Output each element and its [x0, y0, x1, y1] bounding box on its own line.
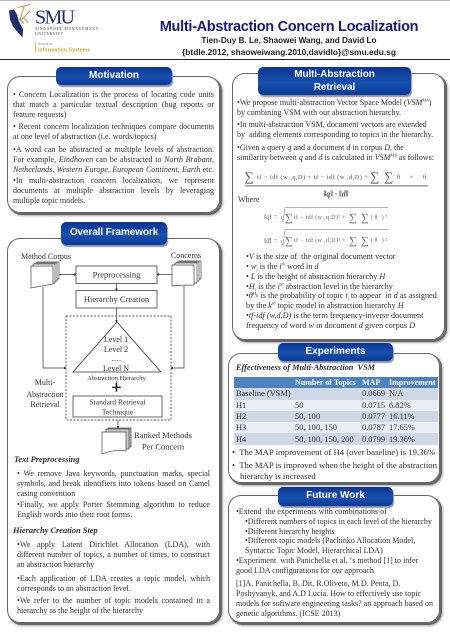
- heading: multi-abstraction retrieval: Retrieval: [314, 82, 355, 93]
- heading: future work: Future Work: [306, 490, 365, 501]
- text: motivation bullets: multiple topic models.: [13, 196, 85, 205]
- heading: experiments: Experiments: [305, 346, 366, 357]
- formula: similarity: ‖q‖ · ‖d‖: [323, 190, 349, 198]
- formula: norm q: ‖d‖ =: [264, 237, 278, 245]
- header band: [0, 0, 450, 60]
- text: experiment findings: [232, 447, 437, 481]
- box: standard retrieval technique: [73, 396, 162, 417]
- text: VSM description: by combining VSM with our abstraction hierarchy.: [237, 108, 401, 117]
- text: motivation bullets: •A word can be abstracted at multiple levels of abstraction.: [13, 145, 214, 154]
- panel: overall framework: [7, 238, 220, 623]
- text: VSM description: by adding elements corresponding to topics in the hierarchy.: [237, 130, 433, 139]
- label: multi-abstraction retrieval: Multi-: [35, 378, 56, 387]
- text: experiment findings: • The MAP improvement of H4 (over baseline) is 19.36%: [232, 447, 435, 457]
- text: motivation bullets: [12, 90, 214, 205]
- logo: SMU: School of: [38, 42, 52, 46]
- formula: norm q: ∑: [349, 235, 357, 247]
- text: notation list: •θHk is the probability of topic ti to appear in d as assigned: [246, 291, 437, 302]
- panel: motivation: [7, 76, 220, 213]
- text: VSM description: similarity between q and d is calculated in VSMMA as follows:: [237, 153, 434, 162]
- text: future work bullets: [236, 507, 432, 575]
- formula: norm q: +: [342, 238, 346, 244]
- text: hierarchy creation bullets: an abstraction hierarchy: [17, 560, 94, 569]
- formula: similarity: θ × θ: [397, 174, 426, 181]
- text: future work bullets: •Different topic models (Pachinko Allocation Model,: [245, 536, 415, 545]
- text: hierarchy creation bullets: •We apply Latent Dirichlet Allocation (LDA), with: [17, 540, 210, 549]
- box: standard retrieval technique: Standard Retrieval: [89, 398, 146, 406]
- text: future work bullets: •Extend the experiments with combinations of: [236, 507, 387, 516]
- text: future work bullets: good LDA configurations for our approach: [236, 566, 374, 575]
- box: preprocessing: Preprocessing: [93, 270, 141, 280]
- logo: SMU: UNIVERSITY: [35, 32, 63, 36]
- text: notation list: by the kth topic model in abstraction hierarchy H: [246, 301, 404, 310]
- heading: overall framework: Overall Framework: [70, 227, 158, 238]
- table: results: 0.0777: [362, 412, 385, 421]
- label: ranked methods: Ranked Methods: [134, 430, 192, 440]
- text: preprocessing bullets: [17, 469, 210, 519]
- text: hierarchy creation bullets: [17, 540, 210, 615]
- text: preprocessing bullets: casing convention: [17, 489, 75, 498]
- formula: similarity: tf − idf (w ,q,D) × tf − idf (w ,d,D) +: [257, 174, 368, 181]
- panel: multi-abstraction retrieval: [232, 73, 445, 340]
- formula: similarity: ∑: [370, 169, 379, 184]
- text: notation list: • L is the height of abstraction hierarchy H: [246, 272, 385, 281]
- label: concerns: Concerns: [171, 251, 201, 260]
- table: results: 0.0787: [362, 423, 385, 432]
- triangle: abstraction hierarchy: ….: [111, 354, 121, 363]
- text: preprocessing bullets: •Finally, we apply Porter Stemming algorithm to reduce: [17, 500, 210, 509]
- text: motivation bullets: that match a particular textual description (bug reports or: [13, 100, 214, 109]
- text: preprocessing bullets: • We remove Java keywords, punctuation marks, special: [17, 469, 210, 478]
- label: ranked methods: Per Concern: [142, 442, 185, 452]
- text: VSM description: •Given a query q and a document d in corpus D, the: [237, 143, 404, 152]
- table: results: 0.0669: [362, 389, 385, 398]
- formula: norm q: tf − idf (w ,q,D)²: [294, 214, 340, 221]
- logo: SMU: SMU: [35, 6, 76, 28]
- label: ranked methods: [134, 430, 192, 452]
- label: method corpus: Method Corpus: [21, 252, 71, 261]
- panel: experiments: [228, 353, 440, 483]
- text: hierarchy creation bullets: different number of topics, a number of times, to construct: [17, 550, 210, 559]
- table: results: H4: [236, 435, 246, 444]
- emails: {btdle.2012, shaoweiwang.2010,davidlo}@smu.edu.sg: [182, 46, 396, 56]
- formula: norm q: tf − idf (w ,d,D)²: [294, 237, 340, 244]
- title: Multi-Abstraction Concern Localization: [160, 18, 418, 34]
- formula: norm q: ∑: [285, 235, 293, 247]
- table: results: Improvement: [389, 378, 436, 387]
- table: results: [234, 377, 438, 445]
- text: VSM description: •We propose multi-abstraction Vector Space Model (VSMMA): [237, 98, 431, 107]
- text: notation list: • wi is the ith word in d: [246, 261, 318, 273]
- triangle: abstraction hierarchy: [73, 322, 161, 373]
- text: motivation bullets: • Concern Localization is the process of locating code units: [13, 90, 214, 99]
- text: hierarchy creation bullets: •Each application of LDA creates a topic model, which: [17, 574, 210, 583]
- table: results: 6.82%: [389, 401, 411, 410]
- text: preprocessing bullets: English words into their root forms.: [17, 510, 132, 519]
- formula: norm q: ∑: [285, 212, 293, 224]
- table: results: 19.36%: [389, 435, 415, 444]
- text: reference: models for software engineering tasks? an approach based on: [236, 599, 433, 608]
- triangle: abstraction hierarchy: Level 1: [104, 335, 128, 344]
- box: hierarchy creation: Hierarchy Creation: [84, 294, 150, 304]
- dashed box: multi-abstraction retrieval: [66, 316, 171, 420]
- diagram: framework flow: [21, 251, 202, 454]
- text: reference: [1]A. Panichella, B. Dit, R.Oliveto, M.D. Penta, D.: [236, 579, 400, 588]
- text: hierarchy creation bullets: hierarchy as the height of the hierarchy: [17, 606, 143, 615]
- table: results: 0.0799: [362, 435, 385, 444]
- icon: concerns documents: [172, 261, 201, 286]
- heading: multi-abstraction retrieval: [258, 67, 411, 95]
- text: motivation bullets: •In multi-abstraction concern localization, we represent: [13, 176, 214, 185]
- panel: future work: [228, 495, 440, 623]
- formula: similarity: [244, 169, 428, 198]
- text: motivation bullets: documents at multiple abstraction levels by leveraging: [13, 186, 214, 195]
- table: results: 17.65%: [389, 423, 415, 432]
- triangle: abstraction hierarchy: Level 2: [104, 345, 128, 354]
- label: multi-abstraction retrieval: Abstraction: [26, 390, 64, 399]
- text: VSM description: [237, 98, 434, 162]
- text: reference: genetic algorithms. (ICSE 2013): [236, 609, 340, 618]
- text: motivation bullets: • Recent concern localization techniques compare documents: [13, 122, 214, 131]
- formula: norm q: ∑: [349, 212, 357, 224]
- text: reference: Poshyvanyk, and A.D Lucia. How to effectively use topic: [236, 589, 421, 598]
- text: experiment findings: • The MAP is improved when the height of the abstraction: [232, 460, 437, 470]
- formula: norm q: ∑: [361, 235, 369, 247]
- heading: overall framework: [61, 222, 167, 245]
- arrows: flow connectors: [43, 274, 184, 428]
- text: reference: [236, 579, 433, 618]
- heading: multi-abstraction retrieval: Multi-Abstraction: [294, 69, 375, 80]
- text: notation list: •V is the size of the original document vector: [246, 252, 396, 261]
- heading: hierarchy creation step: Hierarchy Creation Step: [13, 526, 98, 535]
- formula: norm q: (θ )²: [371, 214, 387, 221]
- text: motivation bullets: For example, Eindhoven can be abstracted to North Brabant,: [13, 155, 214, 164]
- table: results: 50: [295, 401, 303, 410]
- heading: motivation: [56, 67, 172, 85]
- triangle: abstraction hierarchy: Level N: [103, 364, 129, 373]
- text: notation list: •tf-idf (w,d,D) is the term frequency-inverse document: [246, 311, 423, 320]
- text: motivation bullets: Netherlands, Western Europe, European Continent, Earth etc.: [13, 165, 214, 174]
- formula: similarity: ∑: [244, 169, 254, 184]
- heading: motivation: Motivation: [89, 70, 139, 81]
- icon: ranked documents: [102, 428, 131, 454]
- box: preprocessing: [76, 266, 157, 284]
- text: future work bullets: •Different hierarchy heights: [245, 527, 335, 536]
- logo: SMU: [9, 4, 99, 54]
- formula: norm q: [264, 207, 388, 247]
- heading: future work: [278, 487, 393, 506]
- text: future work bullets: •Experiment with Panichella et al. ‘s method [1] to infer: [236, 556, 418, 565]
- logo: SMU: Information Systems: [38, 48, 90, 54]
- table: results: 0.0715: [362, 401, 385, 410]
- text: motivation bullets: at one level of abstraction (i.e. words/topics): [13, 132, 156, 141]
- text: hierarchy creation bullets: corresponds to an abstraction level.: [17, 584, 131, 593]
- text: notation list: [246, 252, 437, 330]
- label: multi-abstraction retrieval: [26, 378, 64, 409]
- icon: method corpus documents: [31, 262, 59, 288]
- text: preprocessing bullets: symbols, and break identifiers into tokens based on Camel: [17, 479, 210, 488]
- table: results: Number of Topics: [295, 378, 356, 387]
- table: results: Baseline (VSM): [236, 389, 291, 398]
- formula: norm q: ‖q‖ =: [264, 213, 278, 221]
- heading: text preprocessing: Text Preprocessing: [14, 455, 80, 464]
- text: future work bullets: Syntactic Topic Model, Hierarchical LDA): [245, 546, 383, 555]
- formula: norm q: (θ )²: [371, 237, 387, 244]
- label: abstraction hierarchy: Abstraction Hierarchy: [87, 375, 147, 382]
- text: experiment findings: hierarchy is increased: [240, 471, 316, 481]
- text: VSM description: •In multi-abstraction VSM, document vectors are extended: [237, 120, 427, 129]
- formula: norm q: ∑: [361, 212, 369, 224]
- table: results: H1: [236, 401, 246, 410]
- heading: effectiveness: Effectiveness of Multi-Abstraction VSM: [236, 363, 375, 372]
- text: hierarchy creation bullets: •We refer to the number of topic models contained in a: [17, 596, 210, 605]
- heading: experiments: [278, 343, 393, 361]
- text: notation list: frequency of word w in document d given corpus D: [246, 321, 415, 330]
- table: results: H2: [236, 412, 246, 421]
- logo: SMU: SINGAPORE MANAGEMENT: [35, 27, 99, 31]
- authors: Tien-Duy B. Le, Shaowei Wang, and David Lo: [201, 36, 377, 45]
- table: results: H3: [236, 423, 246, 432]
- table: results: N/A: [389, 389, 403, 398]
- box: standard retrieval technique: Technique: [102, 408, 134, 416]
- box: hierarchy creation: [76, 290, 157, 308]
- text: notation list: •Hi is the ith abstraction level in the hierarchy: [246, 281, 393, 292]
- text: future work bullets: •Different numbers of topics in each level of the hierarchy: [245, 517, 432, 526]
- table: results: 16.11%: [389, 412, 415, 421]
- table: results: 50, 100, 150, 200: [295, 435, 354, 444]
- table: results: 50, 100, 150: [295, 423, 337, 432]
- label: multi-abstraction retrieval: Retrieval: [30, 400, 60, 409]
- text: motivation bullets: feature requests): [13, 110, 66, 119]
- table: results: 50, 100: [295, 412, 320, 421]
- table: results: MAP: [362, 378, 380, 387]
- text: where: Where: [238, 195, 259, 204]
- formula: similarity: ∑: [384, 169, 393, 184]
- icon: plus: +: [112, 378, 122, 397]
- formula: norm q: +: [342, 215, 346, 221]
